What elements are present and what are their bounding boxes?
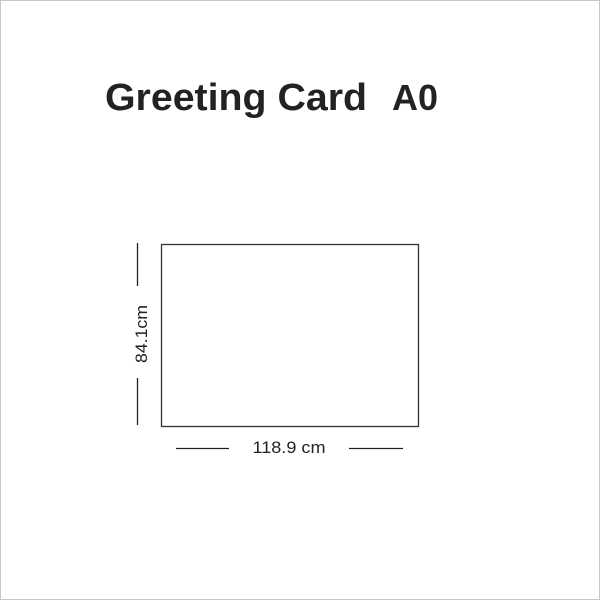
title: A0 xyxy=(392,77,438,118)
width dimension: 118.9 cm xyxy=(252,438,326,457)
height dimension: 84.1cm xyxy=(132,305,151,363)
card rectangle xyxy=(162,244,418,426)
title: Greeting Card xyxy=(105,77,367,119)
